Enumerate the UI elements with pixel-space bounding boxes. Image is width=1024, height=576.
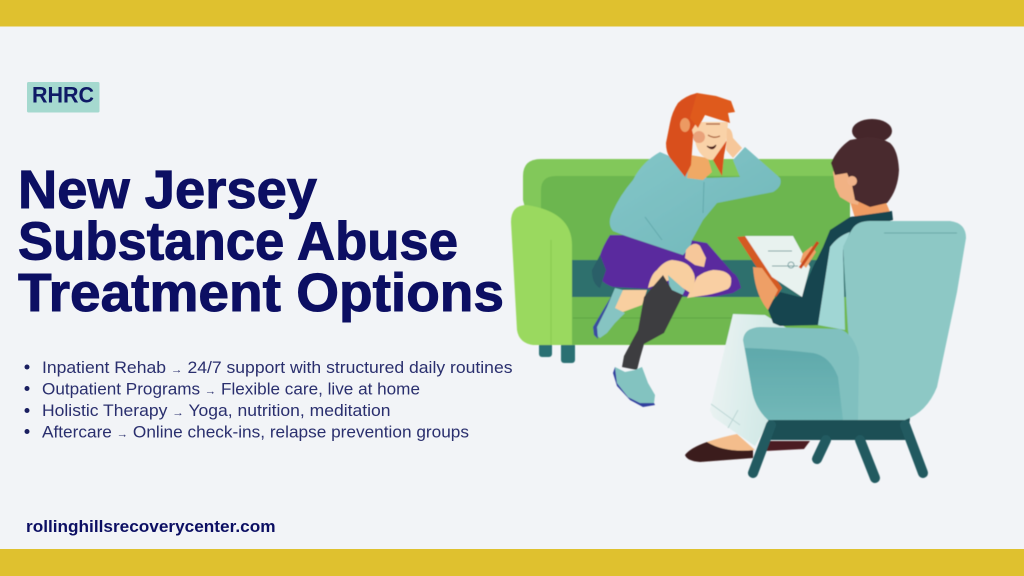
title: Treatment Options (18, 263, 504, 323)
illustration: counselling session (511, 93, 966, 478)
jacket (767, 211, 893, 326)
hand on head (726, 128, 742, 158)
RHRC badge: RHRC (32, 82, 94, 108)
icon: green sofa (511, 159, 850, 363)
neck and face (848, 195, 890, 218)
bullet item: inpatient rehab: Inpatient Rehab → 24/7 support with structured daily routines (42, 359, 512, 377)
hair and bun (852, 119, 892, 143)
figure: therapist in armchair (685, 119, 966, 478)
flat shoe (685, 442, 753, 462)
bullet item: outpatient programs: Outpatient Programs → Flexible care, live at home (42, 380, 420, 398)
chair arm (743, 327, 859, 420)
clipboard (737, 236, 782, 297)
bullet item: aftercare: Aftercare → Online check-ins, relapse prevention groups (42, 424, 469, 442)
sweater and arm (610, 147, 781, 255)
neck (687, 155, 712, 180)
red hair back (666, 93, 715, 177)
hands and pen (753, 267, 778, 310)
title: New Jersey (18, 160, 317, 220)
bottom yellow band (0, 549, 1024, 576)
prosthetic leg (622, 275, 683, 370)
hand on skirt (685, 244, 706, 267)
website address: rollinghillsrecoverycenter.com (26, 517, 276, 536)
rear leg and sock (613, 290, 647, 312)
chair back (818, 232, 850, 330)
figure: woman on sofa (592, 93, 781, 407)
pale trousers (710, 314, 790, 446)
title: Substance Abuse (18, 212, 458, 272)
face (692, 122, 728, 160)
prosthetic socket (668, 275, 685, 296)
purple skirt (597, 235, 741, 297)
treatment options list (24, 359, 512, 442)
shoe (615, 367, 655, 403)
chair legs (768, 418, 910, 440)
hair strands (713, 140, 727, 176)
right thigh (687, 270, 731, 298)
top yellow band (0, 0, 1024, 26)
bullet item: holistic therapy: Holistic Therapy → Yoga, nutrition, meditation (42, 402, 390, 420)
left knee (648, 260, 695, 294)
title (18, 160, 504, 323)
